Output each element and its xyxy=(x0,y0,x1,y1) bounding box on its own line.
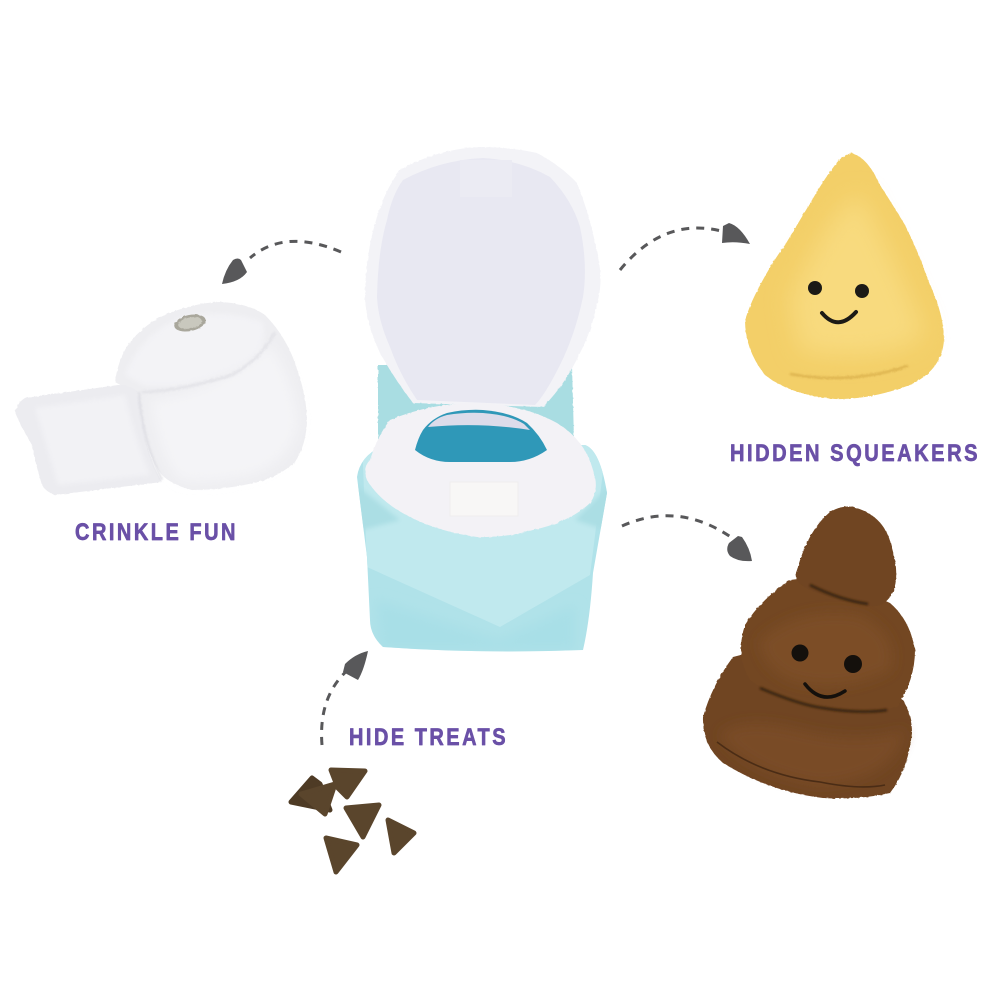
roll body xyxy=(115,302,307,490)
hole xyxy=(415,410,547,462)
hanging sheet flap xyxy=(15,385,162,495)
arrow: to toilet from treats xyxy=(322,651,368,745)
label: crinkle fun: CRINKLE FUN xyxy=(75,519,238,546)
bowl rim xyxy=(365,403,596,537)
face xyxy=(792,644,808,662)
icon: yellow plush face xyxy=(808,281,869,322)
bottom tier xyxy=(703,650,912,798)
icon: toilet plush xyxy=(350,147,615,655)
lid outer xyxy=(365,147,600,407)
toilet tank back xyxy=(378,365,574,440)
icon: dog treats xyxy=(291,770,414,872)
label: hide treats: HIDE TREATS xyxy=(349,724,508,751)
velcro patch xyxy=(450,482,518,516)
squeaker disc xyxy=(173,312,207,334)
toilet base xyxy=(350,440,615,655)
arrow: to yellow squeaker xyxy=(620,223,750,270)
top tier xyxy=(796,507,896,606)
arrow: to poop xyxy=(622,516,752,561)
seam xyxy=(142,332,275,392)
lid inner xyxy=(377,158,585,405)
icon: poop plush xyxy=(703,507,915,798)
arrow: to toilet paper xyxy=(222,241,341,284)
icon: toilet paper roll plush xyxy=(15,302,307,495)
icon: yellow plush xyxy=(745,153,944,399)
middle tier xyxy=(741,575,915,711)
